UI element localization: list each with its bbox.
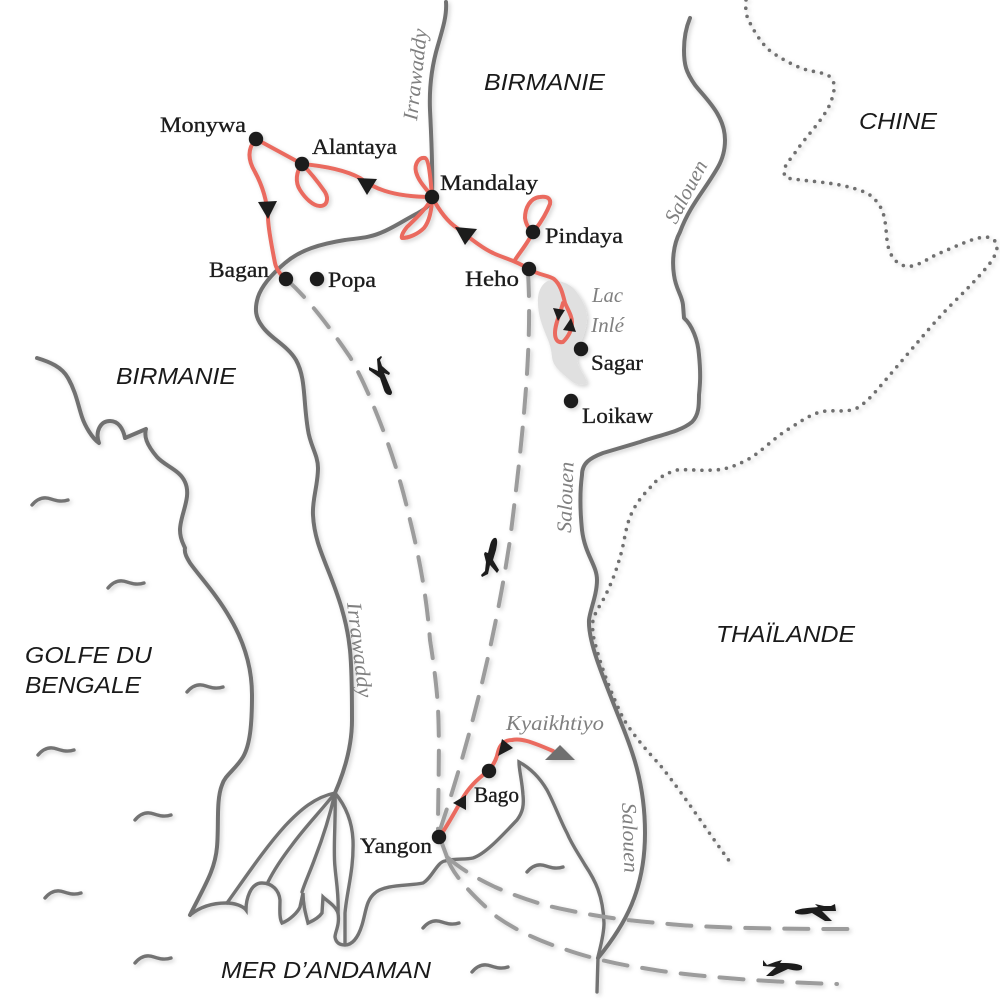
- river and place labels in grey italic: Inlé: [590, 313, 626, 337]
- route: Yangon to Kyaikhtiyo: [439, 739, 553, 837]
- flight path: Heho to Yangon: [440, 272, 529, 830]
- country and sea labels: MER D’ANDAMAN: [221, 957, 431, 983]
- route: salmon itinerary north: [249, 139, 572, 342]
- city labels: Heho: [465, 266, 519, 291]
- western coast: [37, 358, 252, 915]
- flight path: Bagan to Yangon: [287, 280, 439, 830]
- river: Irrawaddy: [256, 2, 446, 793]
- direction arrows: [258, 178, 576, 810]
- flight path: Yangon east upper: [447, 857, 850, 929]
- city labels: [160, 112, 654, 858]
- flight path: Yangon stub: [440, 838, 447, 857]
- plane icons: [369, 356, 836, 976]
- river and place labels in grey italic: [342, 27, 712, 873]
- city labels: Mandalay: [440, 170, 539, 195]
- river: Salouen: [580, 18, 725, 958]
- delta coast and Yangon coast: [190, 762, 604, 992]
- city labels: Sagar: [591, 350, 644, 375]
- city labels: Yangon: [360, 833, 432, 858]
- Irrawaddy delta branches: [227, 793, 353, 944]
- river and place labels in grey italic: Irrawaddy: [342, 600, 378, 700]
- waves: [32, 498, 563, 972]
- country and sea labels: THAÏLANDE: [716, 621, 855, 647]
- city labels: Bagan: [209, 257, 269, 282]
- city markers: [249, 132, 588, 844]
- flight path: Yangon east lower: [447, 857, 837, 984]
- city labels: Loikaw: [582, 403, 654, 428]
- river and place labels in grey italic: Irrawaddy: [398, 27, 432, 123]
- city labels: Popa: [328, 267, 376, 292]
- city labels: Bago: [474, 782, 519, 807]
- river and place labels in grey italic: Salouen: [552, 461, 578, 533]
- border: China and Thailand: [593, 0, 997, 862]
- city labels: Alantaya: [312, 134, 397, 159]
- country and sea labels: GOLFE DU: [25, 642, 153, 668]
- country and sea labels: BIRMANIE: [484, 69, 605, 95]
- lake: Inle: [538, 280, 587, 385]
- river and place labels in grey italic: Lac: [591, 283, 624, 307]
- river and place labels in grey italic: Salouen: [659, 156, 712, 227]
- destination triangle: Kyaikhtiyo: [545, 745, 575, 760]
- country and sea labels: BIRMANIE: [116, 363, 236, 389]
- river and place labels in grey italic: Kyaikhtiyo: [505, 711, 604, 735]
- city labels: Pindaya: [545, 223, 623, 248]
- country and sea labels: CHINE: [859, 108, 937, 134]
- river and place labels in grey italic: Salouen: [617, 802, 643, 873]
- city labels: Monywa: [160, 112, 246, 137]
- country and sea labels: BENGALE: [25, 672, 141, 698]
